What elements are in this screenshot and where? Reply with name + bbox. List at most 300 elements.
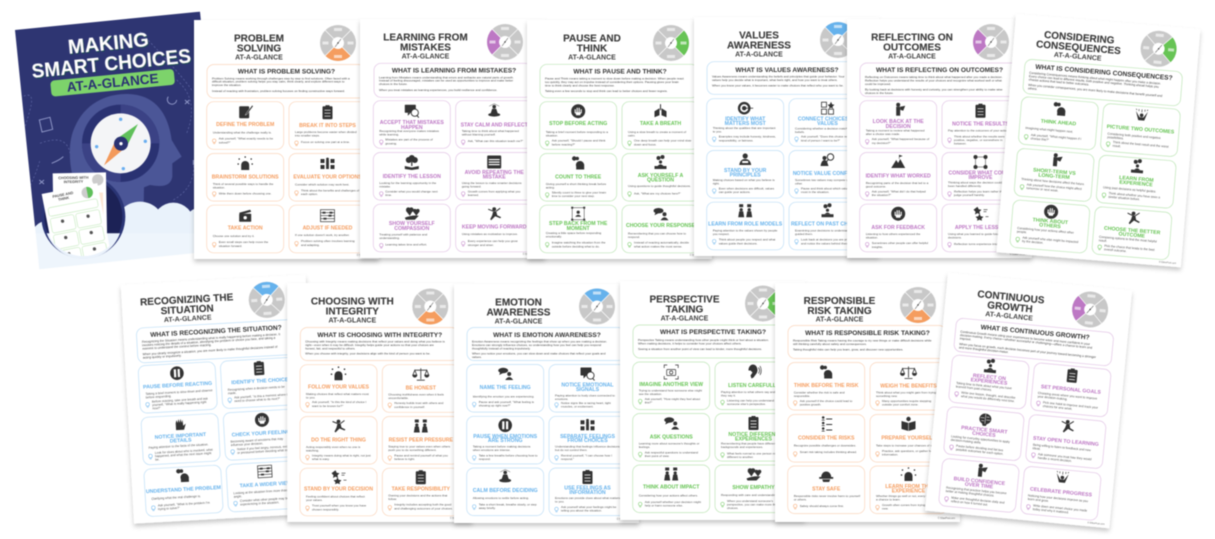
icon: book tree bbox=[405, 155, 419, 170]
body: after a choice was made. bbox=[866, 132, 900, 136]
body: Paying attention to what others say and how bbox=[721, 390, 782, 394]
tip: Notice if you feel angry, nervous, excited, bbox=[237, 444, 293, 451]
body: Imagining what might happen next. bbox=[1025, 126, 1074, 134]
heading: STOP BEFORE ACTING bbox=[549, 121, 607, 127]
intro box bbox=[540, 64, 698, 98]
tip: situation forward. bbox=[219, 244, 242, 248]
icon: wheel bbox=[653, 25, 689, 61]
body: Identifying the emotion you are experiencing. bbox=[473, 394, 534, 398]
icon: thumbs up bbox=[891, 207, 905, 221]
body: Clarifying what the real challenge is. bbox=[151, 494, 201, 501]
tip bbox=[461, 190, 521, 197]
footer: © 5StarPsst.com bbox=[1159, 261, 1176, 265]
body: good outcome. bbox=[866, 184, 886, 188]
body: better at making thoughtful choices. bbox=[946, 489, 995, 498]
title bbox=[311, 296, 394, 324]
heading: SET PERSONAL GOALS bbox=[1041, 384, 1102, 396]
tip: trying to solve?" bbox=[158, 506, 180, 511]
tip bbox=[545, 139, 606, 146]
icon: compare bbox=[580, 419, 594, 430]
card: Pause When Emotions Are Strong bbox=[467, 416, 544, 464]
tip: learned. bbox=[468, 193, 479, 197]
heading: MOMENT bbox=[567, 226, 591, 232]
icon: hard hat bbox=[819, 472, 833, 482]
heading: CONNECT CHOICES TO bbox=[798, 117, 857, 123]
icon: camera frame bbox=[664, 365, 678, 379]
icon: wheel bbox=[487, 24, 523, 60]
tip bbox=[148, 448, 213, 462]
card: Evaluate Your Options bbox=[289, 154, 366, 201]
body: Paying attention to body clues connected to bbox=[555, 394, 615, 398]
card: Ask for Feedback bbox=[860, 204, 937, 252]
body: Recognize possible challenges or downsides. bbox=[794, 444, 856, 448]
tip bbox=[876, 399, 931, 407]
card: Choose Your Response bbox=[622, 205, 699, 253]
body: before responding. bbox=[146, 394, 172, 399]
heading: DECISION bbox=[886, 124, 911, 130]
title: AT-A-GLANCE bbox=[888, 54, 936, 60]
title: CONTINUOUS bbox=[977, 289, 1045, 307]
heading: NOTICE THE RESULTS bbox=[952, 122, 1009, 128]
tip: now?" bbox=[152, 406, 161, 410]
tip: Before reacting, take one breath and ask bbox=[152, 397, 208, 404]
intro box: WHAT IS RECOGNIZING THE SITUATION? bbox=[150, 325, 282, 339]
intro box: By looking back at decisions with honesty and curiosity, you can strengthen your ability to make wise bbox=[865, 88, 1003, 92]
heading: BE HONEST bbox=[406, 386, 437, 392]
intro box: WHAT IS CONTINUOUS GROWTH? bbox=[980, 324, 1090, 342]
body: you respect. bbox=[713, 232, 730, 236]
title bbox=[871, 32, 953, 60]
icon: jumping figure bbox=[332, 420, 346, 432]
card: Be Honest bbox=[382, 365, 459, 412]
intro box: acting quickly or impulsively. bbox=[143, 354, 182, 360]
tip: outside your comfort zone. bbox=[882, 403, 919, 407]
tip bbox=[865, 190, 926, 197]
footer: © 5StarPsst.com bbox=[450, 517, 467, 520]
card: Ask Questions bbox=[633, 414, 710, 461]
title bbox=[975, 289, 1045, 323]
tip bbox=[876, 503, 941, 511]
body: Whether things go well or not, every risk offers bbox=[876, 494, 940, 498]
card: Follow Your Values bbox=[300, 365, 377, 412]
heading: CHOICES bbox=[972, 431, 996, 439]
heading: STAND BY YOUR bbox=[724, 168, 766, 174]
tip: When you understand someone's bbox=[727, 499, 773, 503]
intro box: choices in the future. bbox=[865, 91, 894, 95]
title: AT-A-GLANCE bbox=[568, 54, 616, 62]
intro box bbox=[633, 325, 791, 358]
title: SOLVING bbox=[237, 44, 281, 54]
tip: different to another. bbox=[727, 455, 754, 459]
intro box: Emotions can strongly influence choices, so understanding how you feel can help you respond bbox=[472, 343, 601, 347]
panel: Problem Solving sheet bbox=[194, 20, 379, 259]
heading: TAKE ACTION bbox=[228, 226, 263, 232]
footer: © 5StarPsst.com bbox=[523, 253, 540, 256]
body: If one solution doesn't work, try another. bbox=[295, 233, 350, 237]
heading: OVER TIME bbox=[964, 482, 994, 490]
body: Feeling confident about choices that reflect bbox=[306, 495, 365, 499]
intro box: WHAT IS PAUSE AND THINK? bbox=[573, 68, 667, 76]
heading: IMAGINE ANOTHER VIEW bbox=[639, 382, 703, 388]
tip: positive, negative, or somewhere in bbox=[954, 138, 1003, 142]
heading: BRAINSTORM SOLUTIONS bbox=[212, 174, 279, 180]
tip: happened, and what the next issue might bbox=[155, 451, 212, 458]
heading: UNDERSTAND THE PROBLEM bbox=[146, 485, 221, 495]
card: Learn From Experience bbox=[1096, 155, 1176, 209]
icon: pause bbox=[170, 366, 184, 380]
tip: solved?" bbox=[219, 140, 230, 144]
body: Becoming aware of emotions that may bbox=[231, 437, 283, 444]
tip: possible outcomes for each option. bbox=[956, 447, 1004, 456]
body: learn and grow. bbox=[1027, 497, 1049, 503]
card: Define the Problem bbox=[207, 102, 284, 149]
icon: network bbox=[974, 155, 988, 169]
tip bbox=[545, 190, 606, 198]
tip bbox=[555, 453, 612, 461]
icon: checklist bbox=[582, 470, 592, 484]
body: going forward. bbox=[462, 184, 481, 188]
tip: and notice the values behind them. bbox=[801, 241, 849, 245]
heading: USE FEELINGS AS bbox=[564, 486, 611, 492]
heading: CONSIDER WHAT COULD bbox=[949, 170, 1012, 176]
heading: ASK YOURSELF A bbox=[638, 173, 683, 179]
tip: Smart risk taking includes thinking ahead. bbox=[800, 450, 857, 454]
title bbox=[234, 34, 284, 62]
card: Think About Impact bbox=[633, 465, 710, 513]
tip: Listening can help you understand bbox=[727, 398, 774, 402]
heading: IDENTIFY WHAT bbox=[725, 117, 765, 123]
footer: © 5StarPsst.com bbox=[783, 515, 800, 518]
body: Recognizing that everyone makes mistakes bbox=[379, 129, 439, 133]
intro box: Reflection helps you understand the results of your choices and recognize what worked well or what bbox=[865, 78, 1002, 82]
tip bbox=[638, 500, 701, 508]
tip: What feels normal to one person may feel bbox=[727, 452, 784, 456]
body: Treating yourself with patience and bbox=[379, 233, 427, 237]
tip bbox=[638, 450, 698, 458]
body: Responding with care and understanding. bbox=[721, 493, 778, 497]
body: Taking time to think about what you have bbox=[956, 381, 1012, 390]
intro box: Recognizing the Situation means understanding what is really happening before making a decision. It bbox=[142, 332, 280, 344]
card: Understand the Problem bbox=[144, 465, 223, 517]
icon: wheel bbox=[248, 281, 286, 319]
heading: EXPERIENCES bbox=[735, 436, 772, 442]
intro box: and more thoughtful decision-maker. bbox=[959, 345, 1009, 354]
tip: responsibility, or fairness. bbox=[719, 138, 754, 142]
panel: Reflecting on Outcomes sheet bbox=[847, 19, 1032, 258]
card: Stand By Your Principles bbox=[707, 150, 784, 198]
tip: reflect on how it turned out. bbox=[951, 499, 988, 507]
tip: outside before deciding what to do. bbox=[552, 244, 600, 248]
footer: © 5StarPsst.com bbox=[938, 517, 955, 520]
tip: Ask yourself how the choice might affect bbox=[1027, 182, 1082, 191]
icon: ear bbox=[748, 365, 761, 378]
panel: Considering Consequences sheet bbox=[996, 14, 1200, 267]
card: Show Yourself Compassion bbox=[373, 204, 450, 252]
tip: Pause and remind yourself of what you bbox=[394, 454, 448, 458]
icon: head with ideas bbox=[237, 156, 253, 170]
heading: THINK ABOUT bbox=[1032, 217, 1068, 226]
tip: Consider what you would change next bbox=[385, 190, 438, 194]
icon: checklist person bbox=[976, 104, 986, 118]
tip: before reacting?" bbox=[552, 142, 575, 146]
icon: clipboard bbox=[322, 105, 332, 119]
panel: Learning From Mistakes sheet bbox=[360, 19, 545, 258]
body: Choosing truthfulness even when it feels bbox=[388, 393, 444, 397]
icon: person at chart bbox=[1131, 158, 1144, 173]
tip bbox=[472, 400, 534, 408]
title: AT-A-GLANCE bbox=[495, 318, 543, 326]
tip: can guide your actions. bbox=[719, 190, 751, 194]
tip: Pick the choice that leads to the best bbox=[1104, 244, 1155, 252]
tip: Ask yourself who else might be impacted bbox=[1022, 235, 1078, 244]
body: mistake. bbox=[379, 184, 391, 188]
heading: NOTICE DIFFERENT bbox=[728, 432, 779, 438]
tip bbox=[228, 393, 288, 403]
tip: be. bbox=[155, 457, 160, 462]
title: AT-A-GLANCE bbox=[816, 316, 864, 324]
tip bbox=[1106, 140, 1169, 152]
card: Think Ahead bbox=[1018, 96, 1099, 150]
tip: Ask yourself whether your decision might bbox=[645, 500, 701, 504]
tip bbox=[306, 454, 371, 461]
footer: © 5StarPsst.com bbox=[617, 518, 634, 521]
tip: Every experience can help you grow bbox=[468, 239, 518, 243]
card: Consider the Risks bbox=[788, 414, 865, 462]
icon: bulb idea bbox=[331, 366, 346, 380]
card: Keep Moving Forward bbox=[456, 204, 533, 252]
panel: Responsible Risk Taking sheet bbox=[775, 283, 960, 522]
body: Emotions can provide clues about what matters bbox=[555, 496, 620, 500]
tip: insights. bbox=[872, 245, 883, 249]
tip bbox=[712, 135, 776, 142]
title: TAKING bbox=[666, 304, 704, 316]
icon: lungs bbox=[654, 104, 666, 117]
heading: INFORMATION bbox=[569, 490, 606, 496]
card: Learn From the Experience bbox=[870, 466, 947, 514]
title: PROBLEM bbox=[234, 34, 284, 44]
intro box: WHAT IS PERSPECTIVE TAKING? bbox=[660, 329, 766, 336]
body: Considering both positive and negative bbox=[1107, 132, 1161, 140]
tip: Silently count to three to give your brain bbox=[552, 190, 606, 194]
heading: VALUES bbox=[817, 121, 838, 127]
title: AT-A-GLANCE bbox=[985, 311, 1033, 323]
icon: celebrating person bbox=[1056, 471, 1069, 483]
card: Show Empathy bbox=[715, 465, 792, 513]
card: Brainstorm Solutions bbox=[207, 154, 284, 201]
icon: person bbox=[739, 153, 751, 165]
tip: overall outcome. bbox=[1104, 247, 1127, 253]
tip: Mistakes are part of the process of bbox=[385, 138, 433, 142]
body: emotionally. bbox=[546, 235, 562, 239]
tip bbox=[1036, 400, 1098, 413]
card: Think About Others bbox=[1010, 200, 1090, 253]
panel: Choosing With Integrity sheet bbox=[287, 283, 472, 522]
heading: IDENTIFY THE CHOICE bbox=[231, 377, 289, 386]
heading: PREPARE YOURSELF bbox=[881, 436, 936, 442]
heading: BUILD CONFIDENCE bbox=[953, 476, 1005, 487]
heading: RESIST PEER PRESSURE bbox=[389, 438, 453, 444]
title: AT-A-GLANCE bbox=[328, 318, 376, 324]
intro box: When you know your values, it becomes easier to make choices that reflect who you want to be. bbox=[712, 84, 844, 88]
heading: COUNT TO THREE bbox=[555, 174, 602, 180]
heading: STAY SAFE bbox=[812, 486, 841, 492]
card: Notice the Results bbox=[942, 101, 1019, 148]
heading: CHOOSE YOUR RESPONSE bbox=[626, 223, 696, 229]
tip bbox=[295, 188, 359, 196]
title: AT-A-GLANCE bbox=[661, 316, 709, 322]
body: Examining your decisions to understand what bbox=[795, 229, 857, 233]
heading: TAKE A WIDER VIEW bbox=[239, 480, 292, 489]
tip: Write one lesson, thought, and describe bbox=[961, 391, 1016, 400]
tip bbox=[948, 135, 1005, 146]
intro box: WHAT IS PROBLEM SOLVING? bbox=[238, 68, 335, 76]
intro box: involves noticing the details of a situation, identifying the problem or choice you face, and taking a bbox=[142, 336, 276, 347]
footer: © 5StarPsst.com bbox=[1087, 521, 1105, 526]
body: follow. bbox=[388, 497, 397, 501]
heading: PICTURE TWO OUTCOMES bbox=[1106, 124, 1175, 136]
panel: Pause and Think sheet bbox=[527, 20, 712, 259]
intro box: WHAT IS RESPONSIBLE RISK TAKING? bbox=[805, 330, 930, 337]
panel: Emotion Awareness sheet bbox=[454, 284, 639, 523]
title: REFLECTING ON bbox=[871, 32, 953, 44]
card: Adjust If Needed bbox=[289, 205, 366, 253]
heading: STAY CALM AND REFLECT bbox=[461, 123, 529, 129]
panel: Continuous Growth sheet bbox=[925, 273, 1132, 528]
card: Do the Right Thing bbox=[300, 416, 377, 464]
intro box: Taking even a few seconds to stop and think can lead to better choices and fewer regrets. bbox=[545, 89, 668, 93]
title bbox=[140, 292, 235, 325]
icon: clipboard bbox=[254, 361, 264, 375]
body: uncomfortable. bbox=[388, 396, 409, 400]
icon: hand bbox=[175, 419, 186, 430]
icon: speech heart bbox=[1044, 204, 1059, 219]
icon: clipboard bbox=[748, 416, 758, 430]
card: Ask Yourself a Question bbox=[622, 154, 699, 201]
heading: EXPERIENCES bbox=[970, 377, 1008, 387]
icon: pause bbox=[498, 418, 512, 432]
icon: checklist person bbox=[416, 470, 426, 484]
tip bbox=[388, 503, 453, 510]
heading: SIGNALS bbox=[576, 387, 600, 393]
tip: Make one thoughtful decision daily and bbox=[951, 496, 1005, 505]
icon: two people bbox=[414, 420, 428, 432]
heading: PRINCIPLES bbox=[730, 172, 761, 178]
body: Making choices based on what you believe is bbox=[713, 178, 775, 182]
tip: experiencing in the situation. bbox=[240, 500, 280, 506]
body: your decision-making. bbox=[1037, 394, 1068, 401]
icon: head with question bbox=[176, 469, 189, 482]
tip: Look for clues about who is involved, what bbox=[155, 448, 213, 455]
body: Take steps to increase your chances of success. bbox=[876, 444, 943, 448]
tip: values guide their decisions. bbox=[719, 241, 758, 245]
body: Noticing how your decisions improve as you bbox=[1028, 493, 1088, 503]
body: Making choices that reflect what matters most bbox=[306, 392, 369, 396]
tip: Remind yourself, "I can choose how I bbox=[561, 453, 612, 457]
body: Recognizing parts of the decision that led to a bbox=[866, 181, 928, 185]
tip bbox=[865, 241, 928, 249]
cover title: MAKING bbox=[67, 29, 150, 59]
card: Stand By Your Decision bbox=[300, 468, 377, 516]
card: Avoid Repeating the Mistake bbox=[456, 152, 533, 200]
tip: Ask respectful questions to understand bbox=[645, 450, 698, 454]
tip bbox=[793, 399, 853, 407]
intro box bbox=[374, 63, 532, 97]
heading: REFLECT ON bbox=[973, 373, 1006, 382]
body: Recognizing when a decision needs to be bbox=[228, 385, 285, 392]
body: Choose one solution and try it. bbox=[213, 234, 255, 238]
intro box: WHAT IS VALUES AWARENESS? bbox=[735, 67, 839, 74]
card: Notice Important Details bbox=[141, 413, 220, 465]
body: Paying attention to the facts of the situation. bbox=[148, 442, 209, 450]
tip bbox=[712, 186, 775, 194]
tip: Trust yourself when you know you have bbox=[312, 504, 366, 508]
card: Calm Before Deciding bbox=[467, 468, 544, 516]
title: CONSEQUENCES bbox=[1036, 39, 1122, 57]
heading: FOLLOW YOUR VALUES bbox=[308, 385, 369, 391]
body: Comparing options to find the most helpful bbox=[1099, 235, 1157, 243]
tip: my decision?" bbox=[872, 141, 891, 145]
body: when emotions are intense. bbox=[473, 448, 511, 452]
tip: between. bbox=[954, 141, 967, 145]
heading: IDENTIFY WHAT WORKED bbox=[866, 174, 931, 180]
icon: chart and bulb bbox=[901, 467, 916, 481]
card: Set Personal Goals bbox=[1030, 362, 1111, 417]
tip: confidence in yourself. bbox=[394, 405, 425, 409]
tip: perspective, you can make more thoughtful bbox=[727, 502, 786, 506]
tip: Practice, ask questions, or gather helpful bbox=[882, 449, 938, 453]
icon: person at desk bbox=[654, 155, 666, 169]
tip: choose this?" bbox=[1030, 136, 1049, 142]
tip: One deep breath can help your mind slow bbox=[634, 139, 691, 143]
title: MISTAKES bbox=[400, 43, 451, 54]
card: Separate Feelings From Choices bbox=[549, 416, 626, 464]
icon: wheel bbox=[412, 288, 448, 324]
tip bbox=[721, 398, 774, 406]
tip: growing. bbox=[385, 141, 397, 145]
tip: telling you about the situation. bbox=[561, 509, 602, 513]
body: decision-making skills. bbox=[951, 438, 982, 445]
body: Staying true to your values even when others bbox=[388, 444, 450, 448]
icon: compare bbox=[320, 158, 334, 169]
tip: time. bbox=[385, 193, 392, 197]
intro box: values. bbox=[472, 355, 482, 359]
tip bbox=[545, 241, 606, 248]
heading: DO THE RIGHT THING bbox=[311, 438, 366, 444]
tip: Take a few breaths before choosing how to bbox=[479, 453, 538, 457]
body: learned from past choices. bbox=[956, 384, 992, 392]
body: Acting responsibly even when no one is bbox=[306, 445, 360, 449]
tip: away briefly. bbox=[479, 506, 496, 510]
body: Using questions to guide thoughtful decisions. bbox=[628, 184, 691, 188]
icon: hearts in hand bbox=[405, 207, 420, 220]
title bbox=[1035, 29, 1122, 64]
card: Stay Open to Learning bbox=[1025, 414, 1106, 469]
title: AT-A-GLANCE bbox=[235, 54, 283, 62]
icon: notebook bbox=[239, 105, 253, 118]
body: Giving yourself a short thinking break before bbox=[546, 182, 606, 186]
body: Think about what you might gain from trying bbox=[876, 390, 936, 394]
body: Looking for everyday opportunities to apply bbox=[951, 434, 1010, 444]
title bbox=[727, 30, 791, 58]
tip: Ask yourself, "Is this the kind of choice I bbox=[312, 400, 366, 404]
heading: KEEP MOVING FORWARD bbox=[462, 225, 527, 231]
heading: ADJUST IF NEEDED bbox=[303, 226, 353, 232]
body: Listening to how others experienced the bbox=[866, 232, 920, 236]
body: guided them. bbox=[795, 232, 813, 236]
intro box: still thinking carefully about safety and consequences. bbox=[793, 342, 867, 346]
tip: positive growth. bbox=[800, 403, 821, 407]
tip bbox=[212, 240, 269, 248]
